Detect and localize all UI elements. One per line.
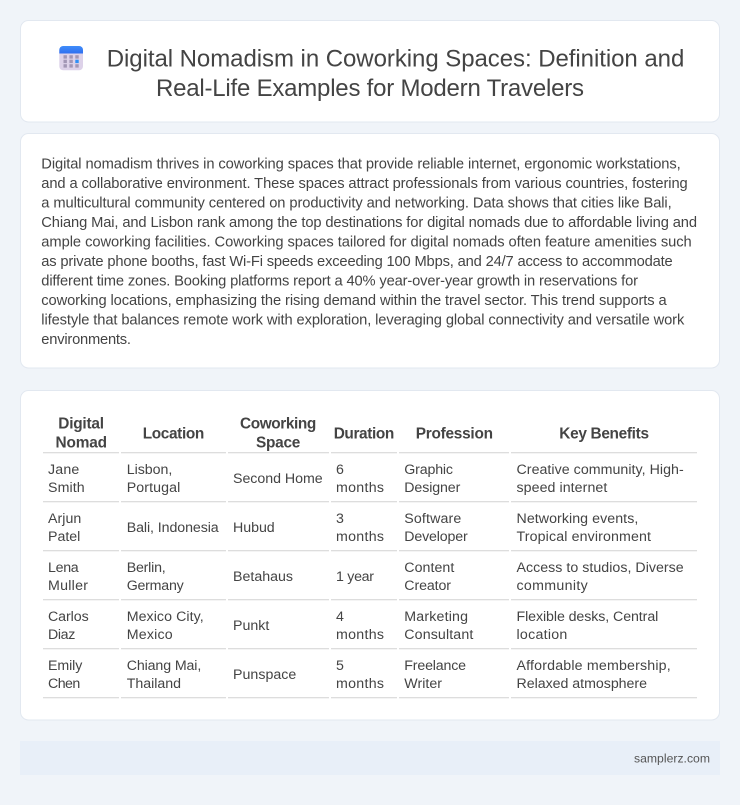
table header row: Space <box>256 434 301 451</box>
text block: introduction paragraph: environments. <box>41 332 131 348</box>
table row: Arjun Patel: Hubud <box>233 520 275 536</box>
table header row <box>56 415 649 451</box>
table row: Lena Muller <box>48 560 684 594</box>
table row: Lena Muller: Muller <box>48 578 88 594</box>
table header row: Digital <box>58 415 104 432</box>
table row: Carlos Diaz: location <box>516 627 567 643</box>
table row: Jane Smith: months <box>336 480 384 496</box>
table row: Carlos Diaz: Mexico <box>127 627 173 643</box>
text block: introduction paragraph: different time zones. Booking platforms report a 40% year-over-year growth in reservations for <box>41 273 638 289</box>
table row: Jane Smith: 6 <box>336 462 344 478</box>
table row: Arjun Patel: Software <box>404 511 461 527</box>
table row: Emily Chen: Relaxed atmosphere <box>516 676 647 692</box>
table row: Carlos Diaz: Flexible desks, Central <box>516 609 658 625</box>
table row: Jane Smith: Smith <box>48 480 85 496</box>
text block: introduction paragraph: lifestyle that balances remote work with exploration, leveraging global connectivity and versatile work <box>41 312 685 328</box>
text block: introduction paragraph: as private phone booths, fast Wi-Fi speeds exceeding 100 Mbps, and 24/7 access to accommodate <box>41 254 673 270</box>
table row: Carlos Diaz: Punkt <box>233 618 269 634</box>
table row: Arjun Patel: Tropical environment <box>516 529 651 545</box>
footer source text: samplerz.com <box>634 751 710 765</box>
table header row: Location <box>143 425 204 442</box>
table header row: Nomad <box>56 434 107 451</box>
table row: Emily Chen: Emily <box>48 658 83 674</box>
table row: Emily Chen: Chen <box>48 676 80 692</box>
table row: Arjun Patel: months <box>336 529 384 545</box>
table row: Emily Chen: Writer <box>404 676 442 692</box>
table row: Carlos Diaz <box>48 609 658 643</box>
table row: Emily Chen: Thailand <box>127 676 181 692</box>
table row: Arjun Patel: Networking events, <box>516 511 638 527</box>
table row: Arjun Patel: Bali, Indonesia <box>127 520 219 536</box>
title: Digital Nomadism in Coworking Spaces: Definition and <box>107 46 684 73</box>
text block: introduction paragraph: Chiang Mai, and Lisbon rank among the top destinations for digital nomads due to affordable living and <box>41 215 697 231</box>
table row: Jane Smith: Graphic <box>404 462 453 478</box>
table row: Lena Muller: community <box>516 578 589 594</box>
table row: Emily Chen: Freelance <box>404 658 466 674</box>
text block: introduction paragraph: and a collaborative environment. These spaces attract professionals from various countries, fostering <box>41 176 688 192</box>
table row: Emily Chen: Affordable membership, <box>516 658 671 674</box>
table row: Carlos Diaz: Mexico City, <box>127 609 204 625</box>
table row: Jane Smith: Portugal <box>127 480 180 496</box>
table row: Lena Muller: Creator <box>404 578 451 594</box>
table header row: Profession <box>416 425 493 442</box>
table row: Emily Chen: 5 <box>336 658 344 674</box>
table row: Emily Chen: months <box>336 676 384 692</box>
panel: header <box>20 20 720 122</box>
table row: Jane Smith: Creative community, High- <box>516 462 684 478</box>
table row: Jane Smith: Lisbon, <box>127 462 172 478</box>
table row: Lena Muller: Content <box>404 560 454 576</box>
icon: calendar <box>59 46 83 70</box>
table row: Carlos Diaz: months <box>336 627 384 643</box>
text block: introduction paragraph: ample coworking facilities. Coworking spaces tailored for digital nomads often feature amenities such <box>41 234 692 250</box>
table row: Arjun Patel: Patel <box>48 529 80 545</box>
table row: Lena Muller: Germany <box>127 578 185 594</box>
panel: introduction <box>20 134 720 368</box>
table header row: Duration <box>334 425 394 442</box>
table row: Carlos Diaz: Consultant <box>404 627 473 643</box>
table row: Carlos Diaz: Diaz <box>48 627 75 643</box>
table row: Emily Chen <box>48 658 671 692</box>
table row: Jane Smith <box>48 462 684 496</box>
table row: Jane Smith: Designer <box>404 480 461 496</box>
title <box>107 46 684 102</box>
table row: Lena Muller: 1 year <box>336 569 374 585</box>
text block: introduction paragraph: coworking locations, emphasizing the rising demand within the travel sector. This trend supports a <box>41 293 668 309</box>
table header row: Key Benefits <box>559 425 649 442</box>
table row: Arjun Patel: Arjun <box>48 511 81 527</box>
table row: Emily Chen: Punspace <box>233 667 296 683</box>
title: Real-Life Examples for Modern Travelers <box>156 75 584 102</box>
table row: Lena Muller: Betahaus <box>233 569 293 585</box>
table row: Arjun Patel: 3 <box>336 511 344 527</box>
table row: Lena Muller: Access to studios, Diverse <box>516 560 684 576</box>
table header row: Coworking <box>240 415 316 432</box>
table row: Lena Muller: Berlin, <box>127 560 166 576</box>
table row: Emily Chen: Chiang Mai, <box>127 658 201 674</box>
table row: Carlos Diaz: Marketing <box>404 609 468 625</box>
table row: Jane Smith: Jane <box>48 462 79 478</box>
table row: Arjun Patel <box>48 511 651 545</box>
table row: Jane Smith: Second Home <box>233 471 323 487</box>
text block: introduction paragraph <box>41 156 697 348</box>
footer bar <box>20 741 720 775</box>
table row: Carlos Diaz: Carlos <box>48 609 89 625</box>
text block: introduction paragraph: a multicultural community centered on productivity and networking. Data shows that cities like Bali, <box>41 195 672 211</box>
table row: Lena Muller: Lena <box>48 560 79 576</box>
table row: Jane Smith: speed internet <box>516 480 607 496</box>
table row: Arjun Patel: Developer <box>404 529 468 545</box>
panel: examples table <box>20 390 720 720</box>
text block: introduction paragraph: Digital nomadism thrives in coworking spaces that provide reliable internet, ergonomic workstations, <box>41 156 681 172</box>
table row: Carlos Diaz: 4 <box>336 609 344 625</box>
